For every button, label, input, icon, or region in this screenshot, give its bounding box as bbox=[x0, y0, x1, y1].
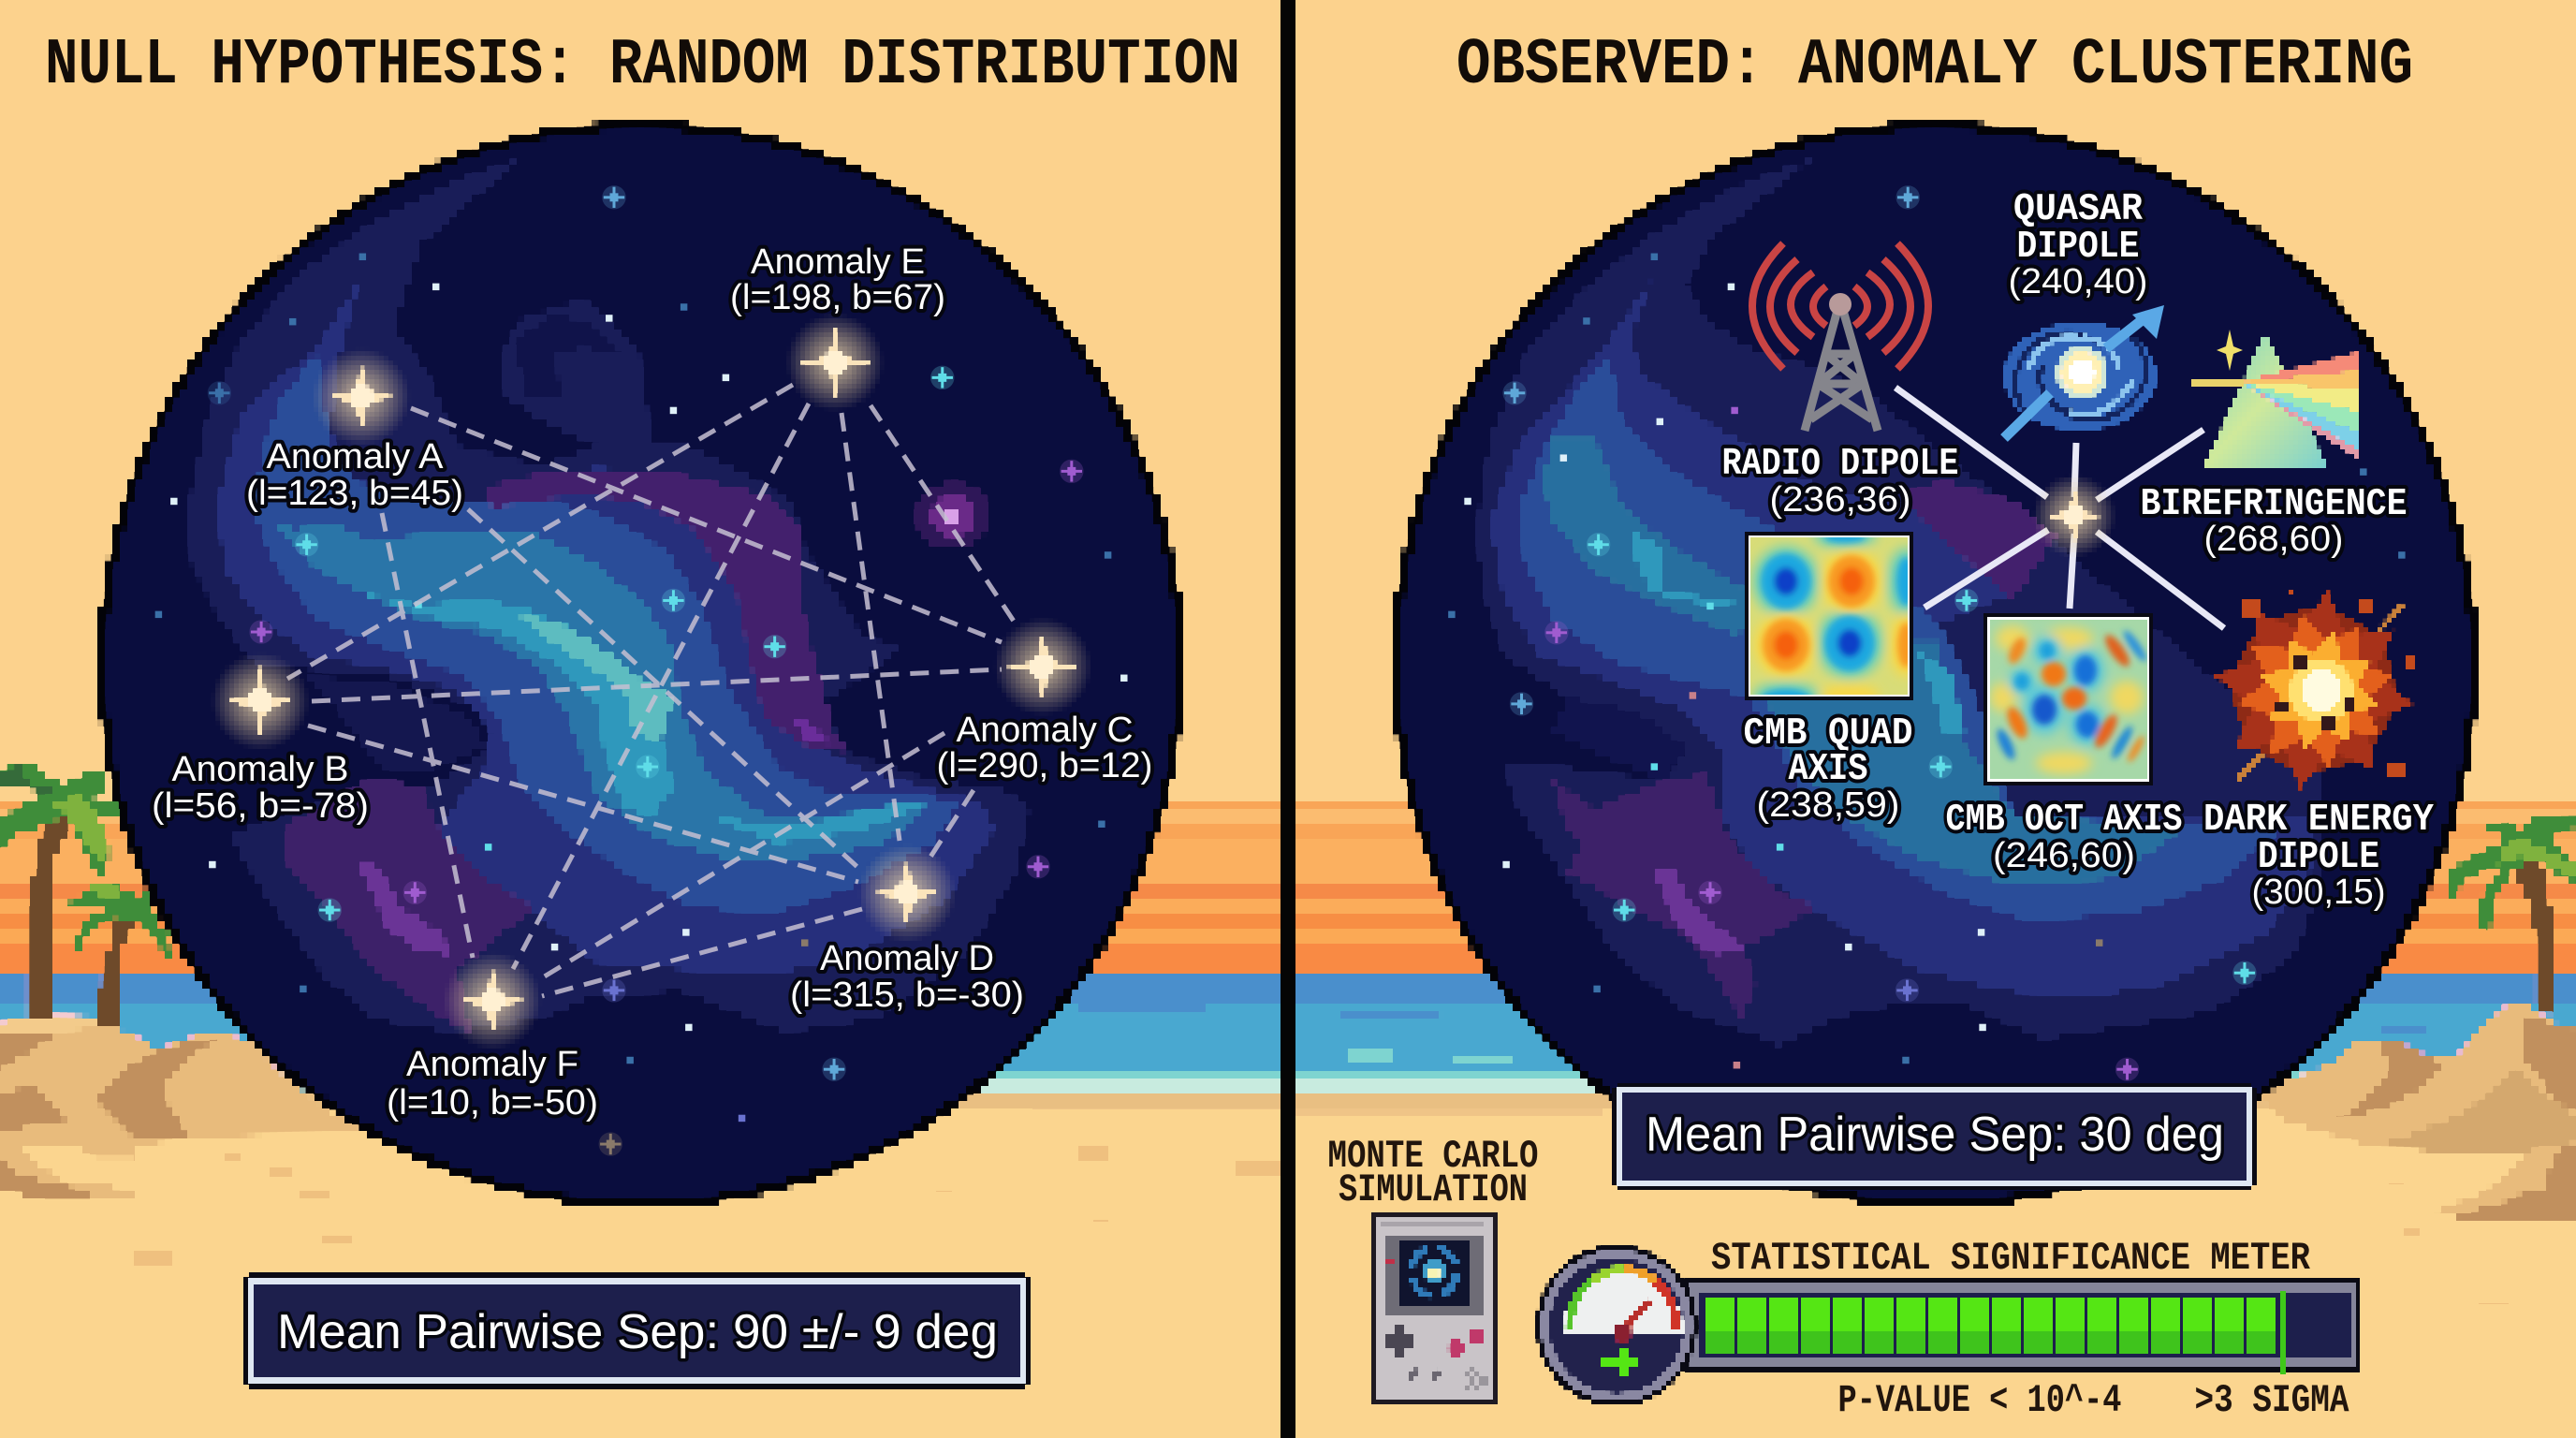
anomaly C marker and label: Anomaly C bbox=[957, 711, 1133, 750]
stat box: null mean separation bbox=[243, 1272, 1031, 1389]
label: radio dipole: (236,36) bbox=[1769, 480, 1911, 520]
network of dashed pairwise lines bbox=[287, 385, 1018, 996]
title: observed: OBSERVED: ANOMALY CLUSTERING bbox=[1456, 29, 2413, 103]
anomaly D marker and label bbox=[790, 844, 1024, 1015]
icon: dark energy explosion bbox=[2201, 577, 2427, 803]
icon: CMB octupole map bbox=[1983, 613, 2153, 785]
title: null hypothesis: NULL HYPOTHESIS: RANDOM DISTRIBUTION bbox=[45, 29, 1240, 103]
monte carlo label: MONTE CARLO bbox=[1327, 1134, 1539, 1179]
anomaly C marker and label bbox=[936, 618, 1153, 785]
sunset stripes bbox=[0, 800, 2576, 976]
meter bar casing bbox=[1685, 1278, 2360, 1372]
label: birefringence: BIREFRINGENCE bbox=[2140, 483, 2408, 526]
label: quasar dipole: DIPOLE bbox=[2016, 226, 2140, 269]
label: CMB oct axis bbox=[1945, 799, 2183, 875]
anomaly E marker and label: (l=198, b=67) bbox=[730, 278, 945, 317]
label: quasar dipole: QUASAR bbox=[2013, 188, 2143, 231]
stat box: observed mean separation: Mean Pairwise Sep: 30 deg bbox=[1646, 1108, 2224, 1162]
label: birefringence: (268,60) bbox=[2203, 520, 2344, 559]
sea bbox=[0, 976, 2576, 1092]
monte carlo label bbox=[1327, 1134, 1539, 1212]
label: birefringence bbox=[2140, 483, 2408, 559]
label: quasar dipole bbox=[2009, 188, 2147, 301]
stat box: null mean separation: Mean Pairwise Sep: 90 ±/- 9 deg bbox=[277, 1305, 998, 1359]
anomaly B marker and label bbox=[152, 653, 369, 826]
label: dark energy dipole: DIPOLE bbox=[2258, 836, 2379, 879]
anomaly A marker and label bbox=[246, 348, 463, 513]
left sky disc with nebula bbox=[97, 121, 1185, 1209]
left dunes and palms bbox=[0, 763, 374, 1201]
meter green segments bbox=[1705, 1298, 2276, 1354]
icon: CMB quadrupole map bbox=[1745, 532, 1913, 700]
label: dark energy dipole: (300,15) bbox=[2252, 873, 2385, 912]
anomaly C marker and label: (l=290, b=12) bbox=[936, 746, 1153, 785]
anomaly F marker and label: Anomaly F bbox=[406, 1045, 578, 1084]
anomaly E marker and label: Anomaly E bbox=[751, 242, 925, 282]
label: quasar dipole: (240,40) bbox=[2009, 262, 2147, 301]
label: CMB quad axis: AXIS bbox=[1788, 748, 1868, 791]
small background stars, left sky bbox=[155, 185, 1128, 1156]
label: CMB quad axis: (238,59) bbox=[1756, 785, 1900, 825]
label: CMB oct axis: CMB OCT AXIS bbox=[1945, 799, 2183, 842]
central cluster hub with spokes bbox=[1895, 388, 2224, 628]
statistical significance meter bbox=[1536, 1236, 2360, 1423]
anomaly A marker and label: (l=123, b=45) bbox=[246, 474, 463, 513]
vertical panel divider bbox=[1281, 0, 1295, 1438]
anomaly F marker and label: (l=10, b=-50) bbox=[387, 1083, 598, 1123]
anomaly D marker and label: Anomaly D bbox=[820, 939, 994, 978]
threshold marker bbox=[2280, 1291, 2286, 1374]
right dunes and palm bbox=[2261, 813, 2576, 1224]
stat box: observed mean separation bbox=[1612, 1083, 2257, 1190]
icon: birefringence prism bbox=[2191, 330, 2358, 467]
meter labels: STATISTICAL SIGNIFICANCE METER bbox=[1711, 1236, 2311, 1281]
gauge dial bbox=[1536, 1245, 1697, 1406]
anomaly B marker and label: Anomaly B bbox=[172, 750, 348, 789]
anomaly B marker and label: (l=56, b=-78) bbox=[152, 786, 369, 826]
anomaly E marker and label bbox=[730, 242, 945, 411]
small background stars, right sky bbox=[1448, 185, 2406, 1081]
sand bbox=[0, 1092, 2576, 1438]
statistical significance meter: >3 SIGMA bbox=[2194, 1378, 2349, 1423]
label: CMB quad axis bbox=[1743, 712, 1913, 825]
console screen bbox=[1383, 1234, 1486, 1313]
right sky disc with nebula bbox=[1391, 121, 2479, 1209]
label: CMB oct axis: (246,60) bbox=[1993, 836, 2135, 875]
label: dark energy dipole bbox=[2203, 799, 2434, 912]
label: radio dipole: RADIO DIPOLE bbox=[1722, 443, 1958, 486]
label: dark energy dipole: DARK ENERGY bbox=[2203, 799, 2434, 842]
monte carlo label: SIMULATION bbox=[1339, 1167, 1528, 1212]
statistical significance meter: P-VALUE < 10^-4 bbox=[1838, 1378, 2121, 1423]
anomaly F marker and label bbox=[387, 952, 598, 1123]
anomaly D marker and label: (l=315, b=-30) bbox=[790, 976, 1024, 1015]
icon: radio tower bbox=[1752, 243, 1928, 431]
anomaly A marker and label: Anomaly A bbox=[266, 437, 444, 477]
label: CMB quad axis: CMB QUAD bbox=[1743, 712, 1913, 756]
label: radio dipole bbox=[1722, 443, 1958, 520]
icon: quasar galaxy with arrow bbox=[2003, 305, 2164, 438]
icon: handheld game console bbox=[1369, 1213, 1497, 1405]
